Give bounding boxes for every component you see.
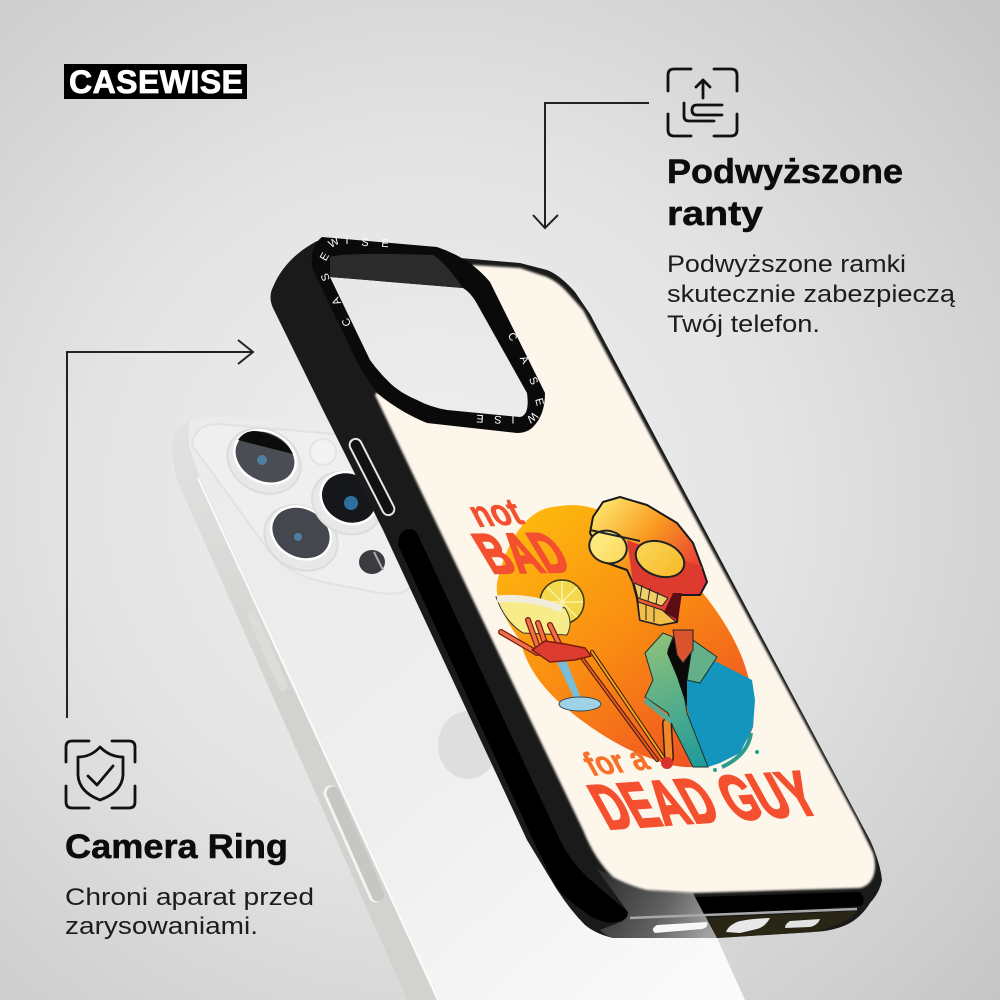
- shirt opening: [667, 636, 693, 707]
- flash: [310, 439, 336, 465]
- port: right: [785, 919, 820, 928]
- orange sun: [497, 505, 753, 767]
- green jacket: [645, 633, 708, 767]
- lens: right: [301, 460, 393, 546]
- bottom highlight: [630, 909, 857, 918]
- ring text: E: [476, 412, 484, 424]
- cream back: [375, 265, 875, 893]
- skull: [590, 497, 707, 625]
- white phone behind the case: [172, 416, 745, 1000]
- ring body: [312, 237, 545, 433]
- side slot: [398, 529, 628, 923]
- stem: [556, 655, 581, 698]
- skull mouth: [664, 593, 682, 620]
- ring text: I: [345, 235, 349, 247]
- ring text: A: [330, 294, 344, 307]
- lower black band: [695, 892, 864, 916]
- skeleton arm: [582, 652, 673, 769]
- text: camera ring description: [65, 884, 314, 940]
- camera plateau: [192, 424, 412, 594]
- heading: Camera Ring: Camera Ring: [65, 828, 288, 866]
- lime: [540, 580, 584, 624]
- apple logo: [438, 711, 498, 779]
- ring text: S: [361, 237, 369, 249]
- arrow: left callout: [67, 340, 253, 718]
- jacket cuff: [645, 700, 672, 722]
- text: BAD: BAD: [462, 521, 581, 585]
- ring text: C: [340, 316, 354, 328]
- case body: [270, 241, 882, 938]
- lower translucent corner: [596, 868, 717, 938]
- salt rim: [497, 598, 562, 609]
- inner edge highlight: [198, 478, 438, 1000]
- power button: [348, 437, 396, 517]
- ring text: S: [526, 375, 540, 387]
- text: not: not: [461, 491, 530, 535]
- heading: Podwyższone ranty: ranty: [667, 195, 763, 233]
- text: DEAD GUY: DEAD GUY: [578, 759, 831, 843]
- sensor: [359, 550, 385, 574]
- ring text: E: [381, 238, 389, 250]
- lens: bottom: [253, 493, 349, 583]
- icon: shield: [66, 741, 135, 808]
- ring text: [318, 235, 546, 425]
- ring text: A: [517, 354, 531, 367]
- skeleton neck: [673, 630, 693, 663]
- text: camera ring description: zarysowaniami.: [65, 913, 258, 940]
- heading: Podwyższone ranty: Podwyższone: [667, 153, 903, 191]
- upper inner wall: [330, 254, 463, 288]
- logo: CASEWISE: CASEWISE: [69, 64, 243, 100]
- skeleton hand: [501, 620, 591, 662]
- artwork: not bad for a dead guy: [461, 491, 831, 843]
- ring text: E: [318, 251, 332, 263]
- skull teeth: [634, 583, 676, 625]
- lens: top: [216, 416, 312, 506]
- text: raised edges description: Twój telefon.: [667, 311, 820, 338]
- side buttons: [252, 615, 378, 895]
- phone side edge: [172, 420, 437, 1000]
- ring text: W: [327, 235, 342, 251]
- bowl: [496, 597, 570, 635]
- camera opening: [330, 277, 528, 417]
- text: for a: for a: [576, 741, 656, 783]
- icon: raised edges: [668, 69, 737, 136]
- port: left: [653, 922, 707, 933]
- ring text: S: [494, 413, 502, 425]
- jacket right collar: [687, 640, 717, 683]
- text: raised edges description: skutecznie zabezpieczą: [667, 281, 956, 308]
- ring text: C: [505, 331, 519, 343]
- blue shirt: [687, 660, 755, 767]
- text: camera ring description: Chroni aparat przed: [65, 884, 314, 911]
- arrow: top callout: [533, 103, 649, 228]
- olive reflection: [708, 911, 857, 938]
- black case: [270, 241, 882, 938]
- ring text: E: [532, 397, 546, 407]
- text: raised edges description: Podwyższone ramki: [667, 251, 906, 278]
- camera ring: [312, 236, 545, 433]
- margarita glass: [496, 580, 601, 711]
- foot: [559, 697, 601, 711]
- heading: Podwyższone ranty: [667, 153, 903, 233]
- ring text: I: [511, 413, 515, 425]
- port: centre: [726, 918, 770, 933]
- ring text: W: [524, 409, 540, 425]
- skull face: [627, 540, 702, 600]
- text: raised edges description: [667, 251, 956, 338]
- sunglasses: [585, 526, 689, 584]
- ring text: S: [319, 271, 333, 283]
- phone back: [172, 416, 745, 1000]
- teal splash: [714, 733, 758, 772]
